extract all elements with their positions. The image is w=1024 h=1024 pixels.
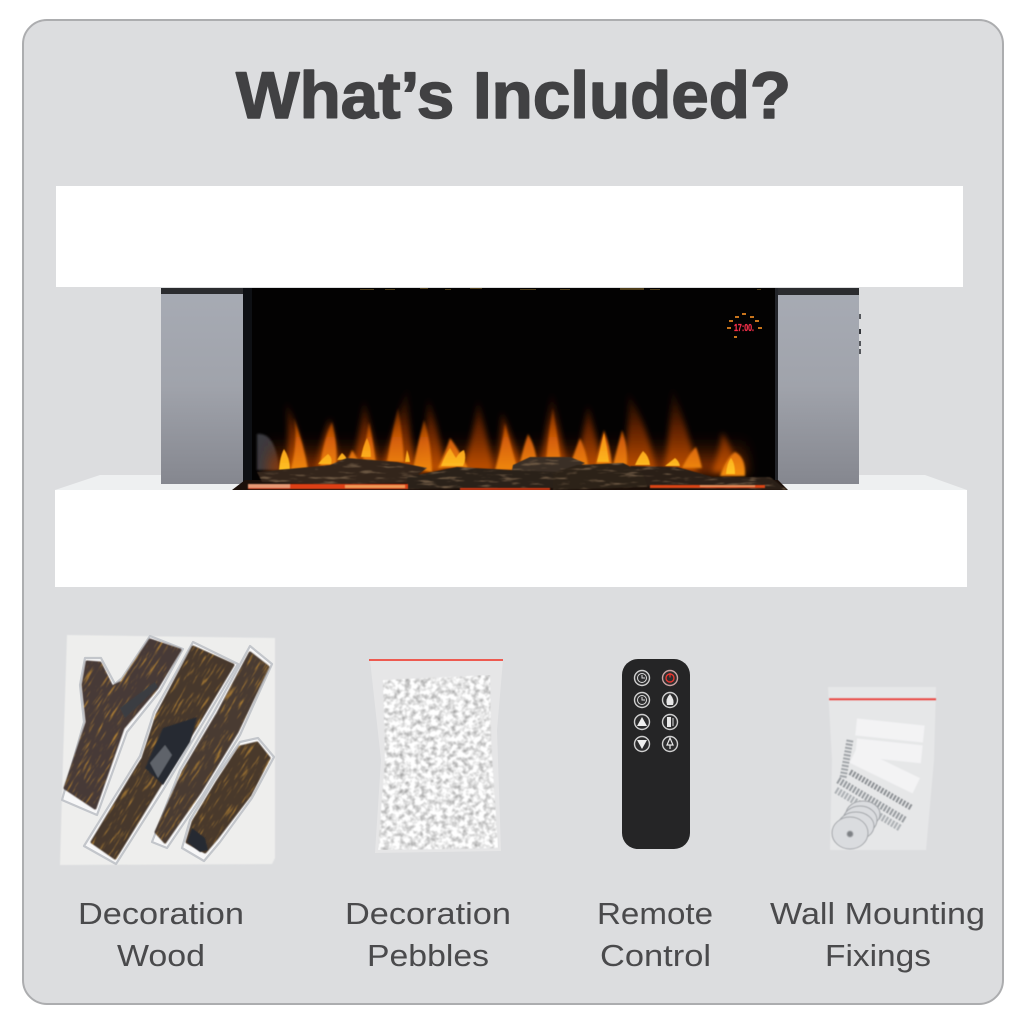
logs: [0, 548, 367, 950]
label: wall mounting fixings: [770, 896, 985, 973]
label: decoration wood: Decoration: [78, 896, 244, 931]
label: remote control: [597, 896, 713, 973]
lower shelf top surface: [55, 475, 967, 490]
digital clock display: 17:00.: [734, 322, 754, 334]
wall plugs: [850, 718, 925, 793]
lower white shelf: [55, 490, 967, 587]
remote buttons: [634, 670, 678, 752]
label: decoration wood: [78, 896, 244, 973]
clear bag: [370, 660, 503, 853]
white packing sheet: [60, 635, 275, 865]
upper white mantel: [56, 186, 963, 287]
firebox: [243, 288, 778, 484]
product: decoration pebbles: [369, 659, 503, 853]
product: decoration wood: [0, 548, 367, 950]
product: wall mounting fixings: [828, 687, 936, 850]
clear bag: [828, 687, 936, 850]
pebbles: [378, 675, 498, 850]
flames: [268, 385, 746, 476]
burning logs: [257, 457, 787, 490]
label: wall mounting fixings: Wall Mounting: [770, 896, 985, 931]
label: wall mounting fixings: Fixings: [825, 938, 931, 973]
label: decoration pebbles: Pebbles: [367, 938, 489, 973]
label: decoration wood: Wood: [117, 938, 205, 973]
right grey column: [778, 288, 861, 484]
left grey column: [161, 288, 243, 484]
remote button icons: [637, 673, 674, 749]
screws: [836, 740, 912, 828]
label: remote control: Control: [600, 938, 711, 973]
plastic blister outlines: [62, 636, 274, 864]
red zip seal: [369, 659, 503, 661]
digital clock display: [727, 313, 762, 338]
red zip seal: [829, 698, 936, 700]
charred patches: [120, 682, 208, 852]
label: decoration pebbles: [345, 896, 511, 973]
glowing embers: [248, 484, 765, 490]
washers: [832, 801, 880, 849]
ember base: [232, 480, 788, 490]
fireplace illustration: [55, 288, 967, 490]
label: remote control: Remote: [597, 896, 713, 931]
product: remote control: [622, 659, 690, 849]
label: decoration pebbles: Decoration: [345, 896, 511, 931]
title: What’s Included?: [236, 58, 791, 132]
